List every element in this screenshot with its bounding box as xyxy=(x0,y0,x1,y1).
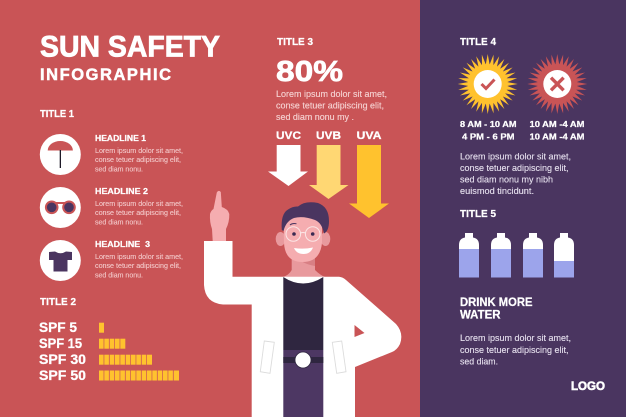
arrow: UVC xyxy=(268,130,308,186)
icon: water bottle 4 xyxy=(554,233,574,278)
icon: sunglasses xyxy=(40,187,81,228)
panel: title 4 safe sun hours xyxy=(457,36,588,196)
stat: 80%: 80% xyxy=(276,56,343,88)
trousers xyxy=(283,350,323,417)
text: unsafe times: 10 AM -4 AM xyxy=(530,132,584,142)
text: headline 3: HEADLINE 3 xyxy=(95,239,150,249)
chart labels: SPF values: SPF 5 xyxy=(39,320,77,335)
panel: title 5 hydration xyxy=(459,208,574,366)
panel: title 2 SPF bar chart xyxy=(39,296,179,383)
neck xyxy=(283,250,325,282)
text: UV description xyxy=(276,89,387,122)
lab coat xyxy=(204,241,401,417)
text: headline 3: Lorem ipsum dolor sit amet, xyxy=(95,252,183,261)
eyebrow xyxy=(290,223,296,225)
text: headline 2: conse tetuer adipiscing elit, xyxy=(95,208,181,217)
text: sun hours description: sed diam nonu my nibh xyxy=(460,174,553,184)
panel: title 1 sun protection items: TITLE 1 xyxy=(40,108,74,120)
arrow: UVA: UVA xyxy=(356,130,382,142)
text: headline 2: Lorem ipsum dolor sit amet, xyxy=(95,199,183,208)
belt xyxy=(283,357,323,363)
arrow: UVA xyxy=(349,130,389,218)
text: headline 2 xyxy=(95,186,183,226)
text: hydration description: sed diam. xyxy=(460,356,498,366)
arrow: UVC: UVC xyxy=(276,130,301,142)
text: UV description: sed diam nonu my . xyxy=(276,112,354,122)
text: headline 1: conse tetuer adipiscing elit, xyxy=(95,155,181,164)
icon: t-shirt xyxy=(40,240,81,281)
bar chart: SPF segments xyxy=(99,323,179,380)
panel: purple background xyxy=(420,0,626,417)
text: sun hours description: Lorem ipsum dolor sit amet, xyxy=(460,152,571,162)
heading: drink more water: DRINK MORE xyxy=(460,297,533,309)
text: hydration description: Lorem ipsum dolor sit amet, xyxy=(460,333,571,343)
text: headline 1: HEADLINE 1 xyxy=(95,133,146,143)
text: headline 2: HEADLINE 2 xyxy=(95,186,148,196)
panel: title 5 hydration: TITLE 5 xyxy=(460,208,496,220)
text: safe times: 8 AM - 10 AM xyxy=(460,119,516,129)
text: unsafe times: 10 AM -4 AM xyxy=(530,119,584,129)
text: headline 1: sed diam nonu. xyxy=(95,164,143,173)
text: headline 3 xyxy=(95,239,183,279)
heading: drink more water xyxy=(460,297,533,322)
title: SUN SAFETY xyxy=(40,30,220,64)
icon: umbrella xyxy=(40,134,81,175)
text: headline 1 xyxy=(95,133,183,173)
arm gap xyxy=(354,325,364,337)
arrow: UVB: UVB xyxy=(316,130,341,142)
icon: red sun with cross xyxy=(527,54,588,114)
eyes xyxy=(292,232,296,236)
text: headline 2: sed diam nonu. xyxy=(95,217,143,226)
panel: title 1 sun protection items xyxy=(40,108,183,281)
icon: water bottle 3 xyxy=(523,233,543,278)
coat pockets xyxy=(260,341,346,373)
belt buckle xyxy=(295,352,311,368)
hair xyxy=(282,202,329,234)
text: sun hours description xyxy=(460,152,571,196)
text: UV description: Lorem ipsum dolor sit amet, xyxy=(276,89,387,99)
icon: yellow sun with check xyxy=(457,54,518,114)
text: headline 3: sed diam nonu. xyxy=(95,270,143,279)
icon: water bottle 1 xyxy=(459,233,479,278)
icon: water bottle 2 xyxy=(491,233,511,278)
panel: title 4 safe sun hours: TITLE 4 xyxy=(460,36,496,48)
heading: drink more water: WATER xyxy=(460,310,501,322)
hand pointing up xyxy=(210,191,229,241)
illustration: doctor pointing upward xyxy=(204,191,401,417)
text: headline 3: conse tetuer adipiscing elit, xyxy=(95,261,181,270)
text: safe times xyxy=(460,119,516,142)
chart labels: SPF values: SPF 30 xyxy=(39,352,86,367)
smile xyxy=(294,248,313,254)
glasses xyxy=(286,227,320,241)
panel: title 3 UV statistics xyxy=(268,36,389,218)
panel: red background xyxy=(0,0,420,417)
chart labels: SPF values xyxy=(39,320,86,383)
text: hydration description xyxy=(460,333,571,366)
chart labels: SPF values: SPF 15 xyxy=(39,336,82,351)
text: unsafe times xyxy=(530,119,584,142)
title xyxy=(40,30,220,84)
arrow: UVB xyxy=(309,130,348,199)
ears xyxy=(276,232,285,246)
text: sun hours description: conse tetuer adipiscing elit, xyxy=(460,163,568,173)
chart labels: SPF values: SPF 50 xyxy=(39,368,86,383)
title: INFOGRAPHIC xyxy=(40,66,171,84)
text: sun hours description: euismod tincidunt. xyxy=(460,186,534,196)
shirt xyxy=(283,277,323,350)
text: UV description: conse tetuer adipiscing elit, xyxy=(276,100,384,110)
logo: LOGO xyxy=(571,379,605,393)
face xyxy=(284,212,322,262)
panel: title 3 UV statistics: TITLE 3 xyxy=(277,36,313,48)
text: headline 1: Lorem ipsum dolor sit amet, xyxy=(95,146,183,155)
text: safe times: 4 PM - 6 PM xyxy=(462,132,514,142)
text: hydration description: conse tetuer adipiscing elit, xyxy=(460,345,568,355)
panel: title 2 SPF bar chart: TITLE 2 xyxy=(40,296,76,308)
